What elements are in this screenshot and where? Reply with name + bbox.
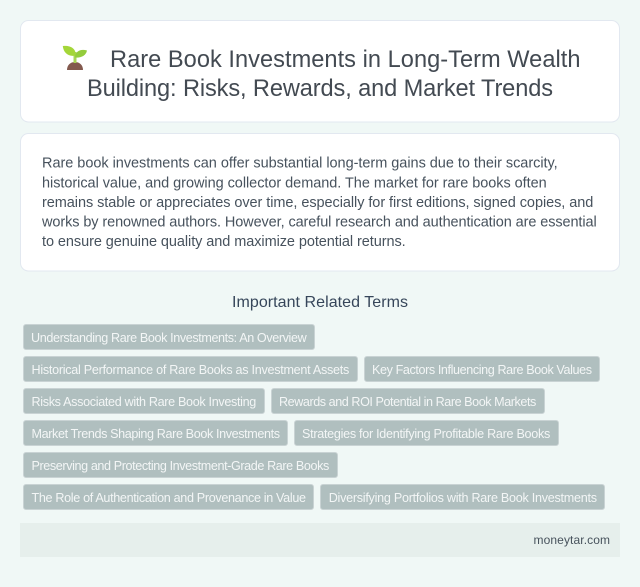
footer bar bbox=[20, 523, 620, 557]
summary paragraph: to ensure genuine quality and maximize potential returns. bbox=[42, 234, 406, 250]
tag: rewards: Rewards and ROI Potential in Rare Book Markets bbox=[279, 395, 536, 409]
tag: market trends: Market Trends Shaping Rare Book Investments bbox=[32, 427, 280, 441]
summary paragraph: Rare book investments can offer substantial long-term gains due to their scarcity, bbox=[42, 156, 558, 172]
tag: risks bbox=[24, 388, 264, 414]
tag: diversifying bbox=[320, 484, 604, 510]
tag: preserving: Preserving and Protecting Investment-Grade Rare Books bbox=[32, 459, 329, 473]
tag: authentication: The Role of Authentication and Provenance in Value bbox=[32, 491, 306, 505]
title text: Building: Risks, Rewards, and Market Trends bbox=[87, 76, 553, 102]
title text: Rare Book Investments in Long-Term Wealth bbox=[110, 47, 580, 73]
tag: authentication bbox=[24, 484, 314, 510]
icon: seedling bbox=[63, 46, 87, 70]
tag: historical performance bbox=[24, 356, 358, 382]
tag: preserving bbox=[24, 452, 338, 478]
summary paragraph: remains stable or appreciates over time, especially for first editions, signed copies, and bbox=[42, 195, 593, 211]
panel: summary card bbox=[20, 134, 620, 271]
heading: important related terms: Important Related Terms bbox=[232, 294, 408, 311]
tag: strategies: Strategies for Identifying Profitable Rare Books bbox=[302, 427, 550, 441]
tag: key factors: Key Factors Influencing Rare Book Values bbox=[372, 363, 592, 377]
footer source text: moneytar.com bbox=[534, 533, 610, 547]
tag: historical performance: Historical Performance of Rare Books as Investment Assets bbox=[32, 363, 349, 377]
panel: title card bbox=[20, 20, 620, 122]
summary paragraph: works by renowned authors. However, careful research and authentication are essential bbox=[41, 214, 597, 230]
tag: diversifying: Diversifying Portfolios with Rare Book Investments bbox=[329, 491, 597, 505]
title text bbox=[87, 47, 580, 102]
tag list bbox=[24, 324, 604, 510]
tag: strategies bbox=[294, 420, 558, 446]
summary paragraph bbox=[41, 156, 597, 250]
tag: understanding: Understanding Rare Book Investments: An Overview bbox=[31, 331, 308, 345]
tag: rewards bbox=[272, 388, 544, 414]
tag: understanding bbox=[24, 324, 314, 350]
tag: market trends bbox=[24, 420, 288, 446]
tag: key factors bbox=[364, 356, 600, 382]
summary paragraph: historical value, and growing collector demand. The market for rare books often bbox=[42, 176, 547, 192]
tag: risks: Risks Associated with Rare Book Investing bbox=[32, 395, 256, 409]
